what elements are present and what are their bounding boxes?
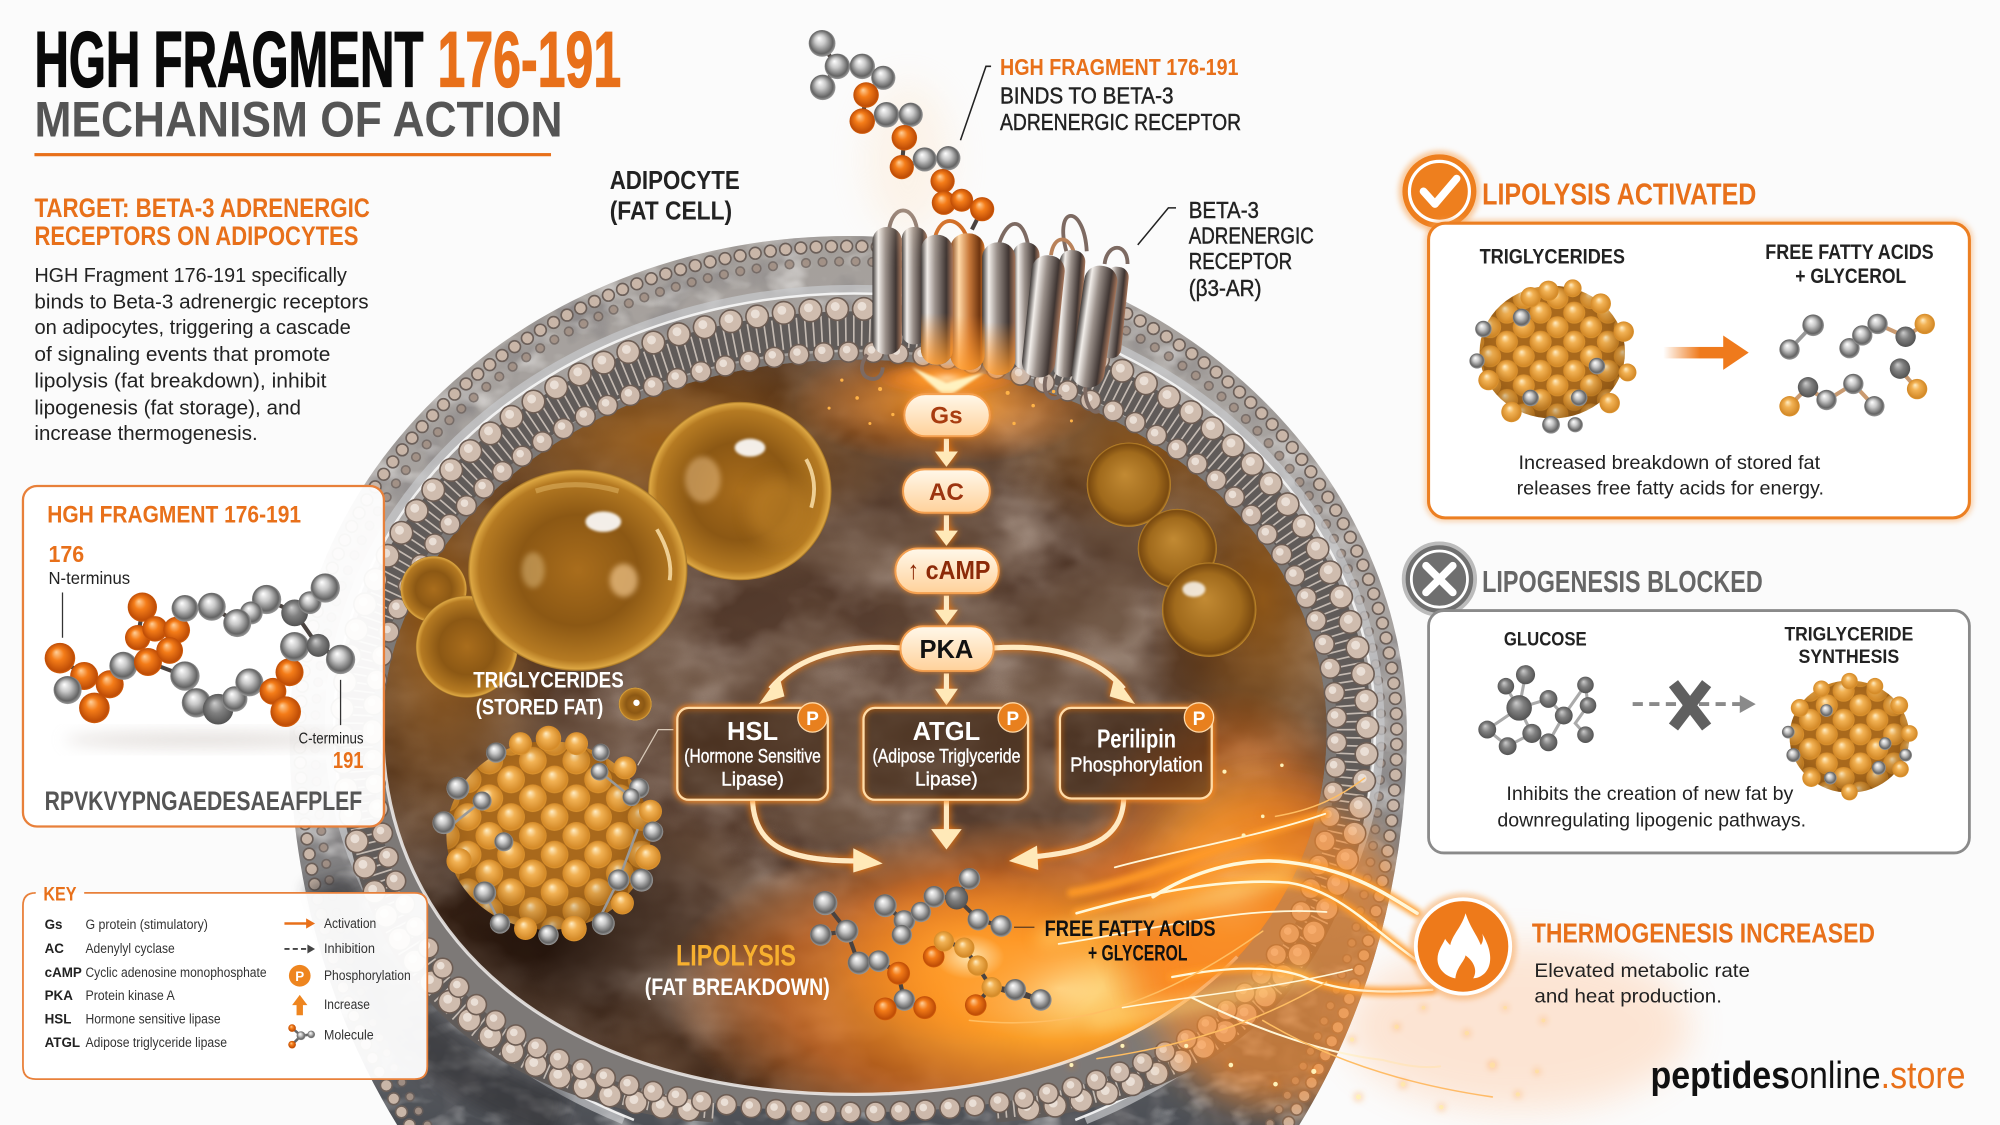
receptor beta-3 xyxy=(828,210,1130,425)
pill: AC: AC xyxy=(929,479,964,506)
logo: peptidesonline.store: peptidesonline.store xyxy=(1651,1054,1966,1097)
cytoplasm xyxy=(385,360,1326,1094)
panel box xyxy=(1429,611,1969,853)
label: triglycerides stored fat: (STORED FAT) xyxy=(476,694,603,719)
target description: lipolysis (fat breakdown), inhibit xyxy=(34,371,327,393)
label: HGH fragment binding: BINDS TO BETA-3 xyxy=(1000,82,1173,108)
pill: PKA: PKA xyxy=(920,636,973,664)
pill: Gs xyxy=(904,394,990,436)
HGH fragment molecule docking on receptor xyxy=(809,30,994,236)
legend: phosphorylation xyxy=(289,965,411,987)
box: ATGL: P xyxy=(1006,709,1019,730)
label: free fatty acids: FREE FATTY ACIDS xyxy=(1045,916,1216,941)
box: Perilipin: P xyxy=(1193,709,1206,730)
title: 176-191 xyxy=(438,15,621,104)
abbreviations list: AC xyxy=(45,941,64,956)
glucose molecule xyxy=(1478,665,1596,755)
labels: TRIGLYCERIDE xyxy=(1784,623,1913,645)
small droplet xyxy=(619,688,652,721)
box: HSL: Lipase) xyxy=(721,770,784,791)
label: adipocyte: (FAT CELL) xyxy=(610,197,732,225)
description xyxy=(1497,784,1806,832)
legend: activation: Activation xyxy=(324,916,376,931)
triglyceride cluster xyxy=(1782,673,1918,800)
panel: key xyxy=(23,885,427,1079)
legend: phosphorylation: P xyxy=(295,969,304,984)
abbreviations list: cAMP xyxy=(45,965,82,980)
large lipid droplet front xyxy=(468,469,688,671)
box: Perilipin: Perilipin xyxy=(1097,725,1176,753)
description: and heat production. xyxy=(1534,986,1722,1008)
abbreviations list: Cyclic adenosine monophosphate xyxy=(85,965,267,980)
label: HGH fragment binding xyxy=(1000,54,1241,135)
abbreviations list: G protein (stimulatory) xyxy=(85,917,208,932)
abbreviations list: Gs xyxy=(45,917,62,932)
heat sparks xyxy=(1069,764,1545,1109)
target description: RECEPTORS ON ADIPOCYTES xyxy=(34,221,358,251)
abbreviations list: HSL xyxy=(45,1012,71,1027)
box: ATGL xyxy=(864,703,1028,800)
adipocyte cell illustration xyxy=(290,210,1690,1125)
abbreviations list: Adenylyl cyclase xyxy=(85,941,175,956)
flowing heat streaks xyxy=(969,778,1492,1097)
labels xyxy=(1480,241,1934,288)
label: HGH fragment binding: ADRENERGIC RECEPTOR xyxy=(1000,109,1241,135)
target description xyxy=(34,193,370,445)
abbreviations list: Hormone sensitive lipase xyxy=(85,1012,221,1027)
heading: LIPOLYSIS ACTIVATED xyxy=(1482,178,1756,212)
label: C-terminus xyxy=(298,680,364,773)
free fatty acid molecules in cell xyxy=(810,868,1052,1020)
orange glow outside cell xyxy=(1346,944,1690,1110)
droplets at left edge xyxy=(401,556,518,698)
lipid bilayer inner pearl row xyxy=(371,349,1337,1112)
title: HGH FRAGMENT xyxy=(34,15,423,104)
labels: GLUCOSE xyxy=(1504,628,1587,650)
right lipid droplets xyxy=(1087,443,1256,657)
description: releases free fatty acids for energy. xyxy=(1517,478,1824,499)
label: beta-3 receptor xyxy=(1189,197,1314,301)
peptide sequence: RPVKVYPNGAEDESAEAFPLEF xyxy=(45,786,362,816)
cascade arrows xyxy=(753,439,1135,872)
labels xyxy=(1504,623,1913,668)
labels: TRIGLYCERIDES xyxy=(1480,246,1625,269)
label: free fatty acids: + GLYCEROL xyxy=(1088,940,1187,965)
label: adipocyte: ADIPOCYTE xyxy=(610,167,740,195)
target description: on adipocytes, triggering a cascade xyxy=(34,317,351,339)
box: ATGL: Lipase) xyxy=(915,770,978,791)
abbreviations list xyxy=(45,917,267,1050)
panel heading: HGH FRAGMENT 176-191 xyxy=(47,501,301,528)
legend: inhibition xyxy=(284,941,375,956)
label: lipolysis: LIPOLYSIS xyxy=(676,940,796,973)
leader line: receptor xyxy=(1138,208,1176,245)
label: N-terminus: N-terminus xyxy=(48,568,130,588)
description xyxy=(1517,453,1824,499)
box: Perilipin: Phosphorylation xyxy=(1070,755,1203,777)
receptor loops xyxy=(862,210,1128,412)
large lipid droplet xyxy=(648,402,832,580)
lipid bilayer xyxy=(340,306,1367,1110)
legend: increase xyxy=(292,995,370,1015)
cell membrane outer band xyxy=(290,236,1407,1125)
heading: THERMOGENESIS INCREASED xyxy=(1532,918,1875,949)
orange heat tint on rim xyxy=(1142,791,1409,1110)
icon: check xyxy=(1399,151,1480,232)
label: triglycerides stored fat: TRIGLYCERIDES xyxy=(473,668,624,693)
label: C-terminus: C-terminus xyxy=(298,731,364,748)
target description: lipogenesis (fat storage), and xyxy=(34,398,301,420)
description: Inhibits the creation of new fat by xyxy=(1506,784,1794,805)
target description: TARGET: BETA-3 ADRENERGIC xyxy=(34,193,370,223)
description xyxy=(1534,960,1750,1008)
target description: increase thermogenesis. xyxy=(34,423,258,445)
pill: cAMP xyxy=(895,548,999,593)
target description: of signaling events that promote xyxy=(34,344,330,366)
legend: increase: Increase xyxy=(324,997,370,1012)
label: beta-3 receptor: RECEPTOR xyxy=(1189,248,1292,274)
description: Elevated metabolic rate xyxy=(1534,960,1750,982)
pill: AC xyxy=(903,469,990,513)
panel box xyxy=(1429,223,1969,518)
label: C-terminus: 191 xyxy=(333,747,364,773)
legend: activation xyxy=(284,916,376,931)
label: free fatty acids xyxy=(1045,916,1216,965)
icon: x xyxy=(1404,543,1475,615)
box: HSL: P xyxy=(806,709,819,730)
front tubes xyxy=(872,227,1119,389)
box: HSL: HSL xyxy=(727,718,778,746)
label: beta-3 receptor: ADRENERGIC xyxy=(1189,223,1314,249)
legend: molecule xyxy=(288,1024,374,1048)
section: lipolysis activated xyxy=(1399,151,1969,518)
signaling cascade xyxy=(677,394,1214,872)
labels: + GLYCEROL xyxy=(1795,265,1906,288)
section: thermogenesis increased xyxy=(1409,893,1875,1008)
pill: cAMP: ↑ cAMP xyxy=(908,557,990,585)
leader line: free fatty acids xyxy=(1014,926,1034,928)
label: lipolysis: (FAT BREAKDOWN) xyxy=(645,974,830,1001)
leader line: HGH fragment xyxy=(960,66,991,140)
label: beta-3 receptor: (β3-AR) xyxy=(1189,275,1261,301)
receptor glow xyxy=(828,361,1073,425)
abbreviations list: ATGL xyxy=(45,1035,80,1050)
box: HSL: (Hormone Sensitive xyxy=(684,747,821,768)
target description: binds to Beta-3 adrenergic receptors xyxy=(34,292,369,314)
back tubes xyxy=(902,227,1130,378)
label: N-terminus xyxy=(48,541,130,638)
blocked dashed arrow xyxy=(1633,684,1756,727)
pill: PKA xyxy=(901,626,994,671)
title underline xyxy=(34,153,551,156)
icon: flame xyxy=(1409,893,1517,1000)
arrow: conversion xyxy=(1663,335,1749,370)
label: N-terminus: 176 xyxy=(48,541,84,567)
triglyceride cluster xyxy=(1469,279,1636,434)
abbreviations list: Adipose triglyceride lipase xyxy=(85,1035,227,1050)
legend: molecule: Molecule xyxy=(324,1028,374,1043)
labels: FREE FATTY ACIDS xyxy=(1765,241,1934,264)
title: MECHANISM OF ACTION xyxy=(34,91,562,147)
free fatty acid molecules xyxy=(1779,314,1935,416)
label: triglycerides stored fat xyxy=(473,668,624,719)
peptide molecule xyxy=(45,573,355,747)
label: adipocyte xyxy=(610,167,740,225)
heading: LIPOGENESIS BLOCKED xyxy=(1482,565,1763,599)
label: HGH fragment binding: HGH FRAGMENT 176-191 xyxy=(1000,54,1239,80)
legend: phosphorylation: Phosphorylation xyxy=(324,968,411,983)
abbreviations list: Protein kinase A xyxy=(85,988,175,1003)
target description: HGH Fragment 176-191 specifically xyxy=(34,265,348,287)
key heading: KEY xyxy=(43,885,77,906)
leader: triglycerides xyxy=(638,730,673,765)
abbreviations list: PKA xyxy=(45,988,73,1003)
triglyceride cluster xyxy=(432,726,663,945)
label: lipolysis xyxy=(645,940,830,1001)
interior rim highlight xyxy=(383,730,1237,1094)
rim under inner pearl row xyxy=(372,352,1337,1112)
description: downregulating lipogenic pathways. xyxy=(1497,811,1806,832)
box: ATGL: ATGL xyxy=(913,718,980,746)
box: ATGL: (Adipose Triglyceride xyxy=(872,747,1020,768)
labels: SYNTHESIS xyxy=(1798,646,1899,668)
title xyxy=(34,15,621,147)
label: beta-3 receptor: BETA-3 xyxy=(1189,197,1259,223)
pill: Gs: Gs xyxy=(930,402,963,429)
legend: inhibition: Inhibition xyxy=(324,941,375,956)
box: Perilipin xyxy=(1060,703,1214,798)
box: HSL xyxy=(677,703,828,800)
panel: HGH fragment structure xyxy=(23,486,384,827)
section: lipogenesis blocked xyxy=(1404,543,1969,853)
bright spark at receptor base xyxy=(912,367,985,398)
description: Increased breakdown of stored fat xyxy=(1518,453,1821,474)
